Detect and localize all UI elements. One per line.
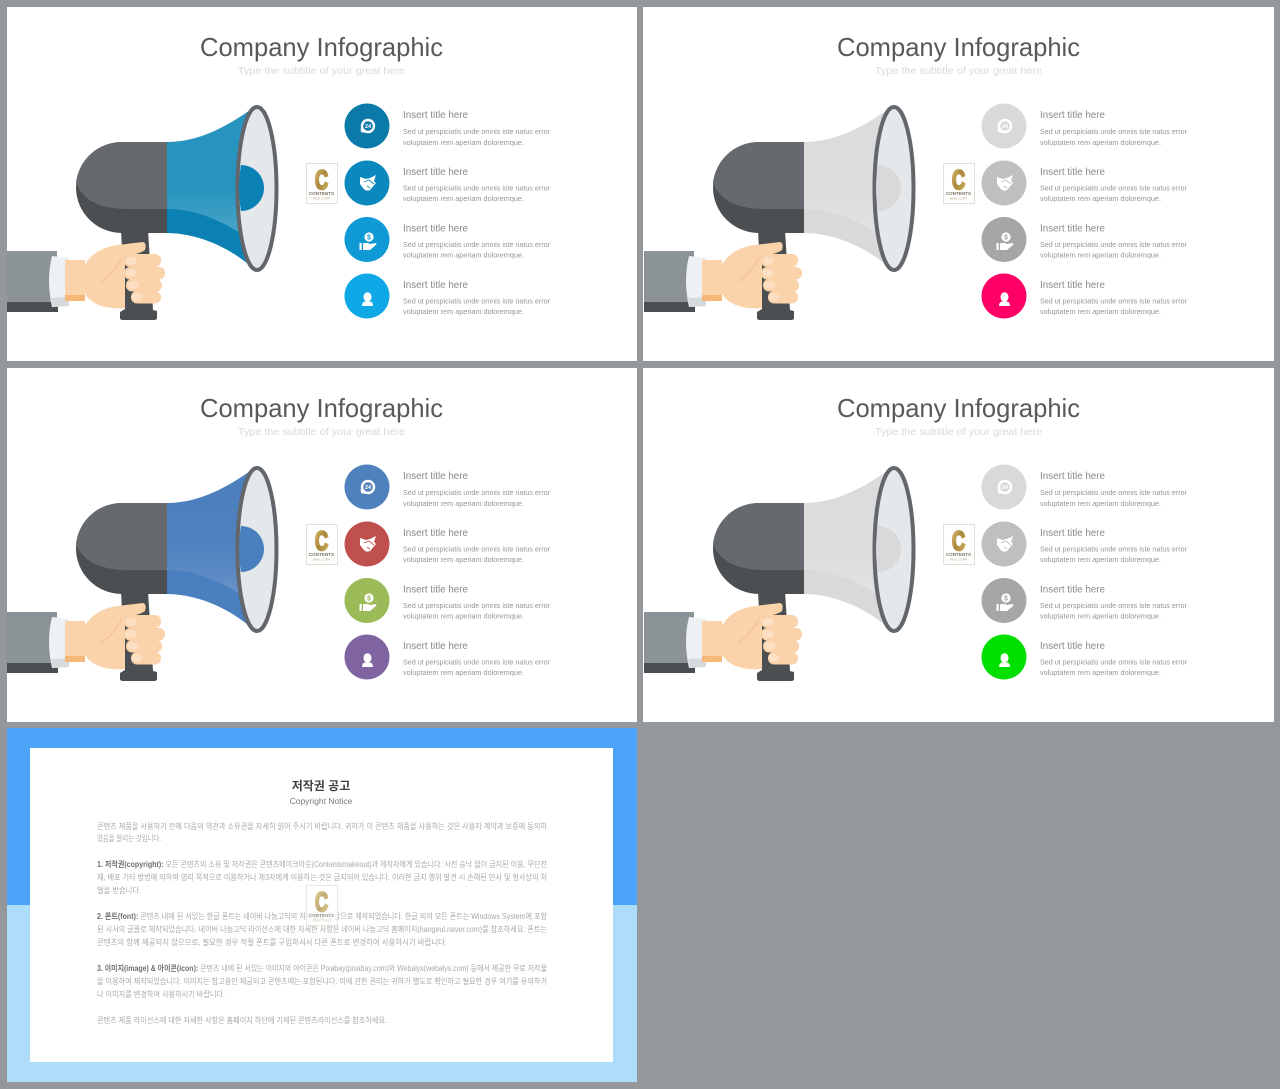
item 1: Insert title here bbox=[1040, 471, 1105, 482]
item 1 bbox=[344, 464, 550, 510]
panel: grey megaphone with green accent bbox=[643, 368, 1274, 722]
item 3: voluptatem rem aperiam doloremque. bbox=[1040, 612, 1161, 620]
item 4: Sed ut perspiciatis unde omnis iste natus error bbox=[403, 296, 550, 306]
item 2: Sed ut perspiciatis unde omnis iste natus error bbox=[403, 544, 550, 554]
text block: copyright: 재, 배포 기타 방법에 의하여 영리 목적으로 이용하거나 제3자에게 이용하는 것은 금지되어 있습니다. 이러한 금지 행위 발견 시 손해된 민사 및 형사상의 처 bbox=[97, 872, 547, 882]
icon: megaphone held in hand bbox=[644, 466, 914, 681]
item 4: Sed ut perspiciatis unde omnis iste natus error bbox=[1040, 296, 1187, 306]
title: Company Infographic bbox=[837, 32, 1080, 62]
item 4: voluptatem rem aperiam doloremque. bbox=[403, 668, 524, 677]
item 1: Sed ut perspiciatis unde omnis iste natus error bbox=[1040, 488, 1187, 497]
item 3 bbox=[344, 578, 550, 623]
item 3: voluptatem rem aperiam doloremque. bbox=[403, 612, 524, 620]
item 1: voluptatem rem aperiam doloremque. bbox=[403, 499, 524, 508]
text block: font: 2. 폰트(font): 콘텐츠 내에 된 서있는 한글 폰트는 네이버 나눔고딕의 저작물을 무상으로 제작되었습니다. 한글 외의 모든 폰트는 Windows System에 포함 bbox=[97, 911, 547, 921]
item 1: Insert title here bbox=[403, 471, 468, 482]
icon: contents logo bbox=[944, 164, 974, 204]
item 1: Sed ut perspiciatis unde omnis iste natus error bbox=[403, 488, 550, 497]
text block: intro bbox=[97, 821, 547, 843]
item 3: Sed ut perspiciatis unde omnis iste natus error bbox=[1040, 240, 1187, 249]
subtitle: Type the subtitle of your great here bbox=[238, 426, 405, 438]
item 3: voluptatem rem aperiam doloremque. bbox=[1040, 250, 1161, 260]
item 2 bbox=[344, 160, 550, 206]
item 1: Sed ut perspiciatis unde omnis iste natus error bbox=[403, 127, 550, 136]
item 3: Insert title here bbox=[403, 224, 468, 234]
title: Company Infographic bbox=[200, 393, 443, 423]
item 3 bbox=[982, 578, 1187, 623]
title: Company Infographic bbox=[837, 393, 1080, 423]
item 3: Sed ut perspiciatis unde omnis iste natus error bbox=[403, 601, 550, 610]
item 4: Insert title here bbox=[1040, 280, 1105, 291]
text block: font: 콘텐츠의 함께 제공되지 않으므로, 필요한 경우 적절 폰트를 구입하셔서 다른 폰트로 변경하여 사용하시기 바랍니다. bbox=[97, 937, 447, 947]
item 2 bbox=[982, 160, 1187, 206]
item 4: Sed ut perspiciatis unde omnis iste natus error bbox=[1040, 658, 1187, 666]
item 4 bbox=[982, 634, 1187, 680]
text block: intro: 였음을 알리는 것입니다. bbox=[97, 833, 161, 843]
text block: images bbox=[97, 963, 547, 999]
item 4: Sed ut perspiciatis unde omnis iste natus error bbox=[403, 658, 550, 666]
icon: contents logo bbox=[306, 886, 338, 926]
item 4: Insert title here bbox=[403, 641, 468, 652]
subtitle: Type the subtitle of your great here bbox=[238, 65, 405, 77]
item 1: voluptatem rem aperiam doloremque. bbox=[403, 138, 524, 147]
icon: megaphone held in hand bbox=[644, 105, 914, 320]
text block: license note: 콘텐츠 제품 라이선스에 대한 자세한 사항은 홈페이지 하단에 기재된 콘텐츠라이선스를 참조하세요. bbox=[97, 1015, 387, 1025]
item 1: Sed ut perspiciatis unde omnis iste natus error bbox=[1040, 127, 1187, 136]
panel: blue megaphone bbox=[7, 7, 637, 361]
item 2 bbox=[344, 522, 550, 566]
item 1 bbox=[982, 104, 1187, 148]
item 3: Insert title here bbox=[403, 584, 468, 596]
icon: megaphone held in hand bbox=[7, 105, 276, 320]
item 4: voluptatem rem aperiam doloremque. bbox=[1040, 307, 1161, 316]
item 2: Sed ut perspiciatis unde omnis iste natus error bbox=[403, 184, 550, 192]
item 4: voluptatem rem aperiam doloremque. bbox=[403, 307, 524, 316]
item 3: Insert title here bbox=[1040, 584, 1105, 596]
item 2: Insert title here bbox=[1040, 528, 1105, 539]
item 2: Sed ut perspiciatis unde omnis iste natus error bbox=[1040, 184, 1187, 192]
item 3: voluptatem rem aperiam doloremque. bbox=[403, 250, 524, 260]
item 3 bbox=[982, 217, 1187, 262]
subtitle: Type the subtitle of your great here bbox=[875, 65, 1042, 77]
item 4: voluptatem rem aperiam doloremque. bbox=[1040, 668, 1161, 677]
item 4 bbox=[344, 634, 550, 680]
item 3: Sed ut perspiciatis unde omnis iste natus error bbox=[1040, 601, 1187, 610]
item 4: Insert title here bbox=[1040, 641, 1105, 652]
item 4 bbox=[982, 274, 1187, 318]
icon: contents logo bbox=[306, 164, 338, 204]
item 2: voluptatem rem aperiam doloremque. bbox=[1040, 555, 1161, 564]
text block: images: 나 이미지를 변경하여 사용하시기 바랍니다. bbox=[97, 989, 225, 999]
panel: copyright notice bbox=[7, 728, 637, 1082]
icon: megaphone held in hand bbox=[7, 466, 276, 681]
text block: copyright: 1. 저작권(copyright): 모든 콘텐츠의 소유 및 저작권은 콘텐츠메이크아웃(Contentsmakeout)과 제작자에게 있습니다. 사전 승낙 없이 금지된 이용, 무단전 bbox=[97, 859, 547, 869]
item 2: voluptatem rem aperiam doloremque. bbox=[1040, 194, 1161, 203]
text block: copyright bbox=[97, 859, 547, 895]
text block: images: 을 이용하여 제작되었습니다. 이미지는 참고용만 제공되고 콘텐츠에는 포함된니다. 이에 관한 권리는 귀하가 별도로 확인하고 필요한 경우 여기를 유의하거 bbox=[97, 976, 547, 986]
icon: contents logo bbox=[944, 524, 974, 564]
panel: indigo megaphone with multicolour icons bbox=[7, 368, 637, 722]
item 2: voluptatem rem aperiam doloremque. bbox=[403, 555, 524, 564]
subtitle: Type the subtitle of your great here bbox=[875, 426, 1042, 438]
item 3 bbox=[344, 217, 550, 262]
item 1 bbox=[344, 104, 550, 148]
item 2: Insert title here bbox=[1040, 167, 1105, 178]
text block: font bbox=[97, 911, 547, 947]
item 2: voluptatem rem aperiam doloremque. bbox=[403, 194, 524, 203]
item 4 bbox=[344, 274, 550, 318]
item 1: Insert title here bbox=[1040, 110, 1105, 121]
item 1: voluptatem rem aperiam doloremque. bbox=[1040, 138, 1161, 147]
subheading: Copyright Notice bbox=[290, 796, 353, 806]
item 2: Sed ut perspiciatis unde omnis iste natus error bbox=[1040, 544, 1187, 554]
title: Company Infographic bbox=[200, 32, 443, 62]
item 2: Insert title here bbox=[403, 528, 468, 539]
item 1: Insert title here bbox=[403, 110, 468, 121]
item 4: Insert title here bbox=[403, 280, 468, 291]
heading: 저작권 공고 bbox=[292, 778, 350, 793]
text block: images: 3. 이미지(image) & 아이콘(icon): 콘텐츠 내에 된 서있는 이미지와 아이콘은 Pixabay(pixabay.com)와 Webalys(webalys.com) 등에서 제공한 무료 저작물 bbox=[97, 963, 547, 973]
item 2 bbox=[982, 522, 1187, 566]
item 1: voluptatem rem aperiam doloremque. bbox=[1040, 499, 1161, 508]
icon: contents logo bbox=[306, 524, 338, 564]
text block: intro: 콘텐츠 제품을 사용하기 전에 다음의 약관과 소유권을 자세히 읽어 주시기 바랍니다. 귀하가 이 콘텐츠 제품을 사용하는 것은 사용자 계약과 보증에 동의하 bbox=[97, 821, 547, 831]
text block: font: 된 시서의 글꼴로 제작되었습니다. 네이버 나눔고딕 라이선스에 대한 자세한 사항은 네이버 나눔고딕 홈페이지(hangeul.naver.com)를 참조하세요. 폰트는 bbox=[97, 924, 547, 934]
item 2: Insert title here bbox=[403, 167, 468, 178]
item 3: Insert title here bbox=[1040, 224, 1105, 234]
item 1 bbox=[982, 464, 1187, 510]
text block: copyright: 벌을 받습니다. bbox=[97, 885, 141, 895]
panel: grey megaphone with pink accent bbox=[643, 7, 1274, 361]
item 3: Sed ut perspiciatis unde omnis iste natus error bbox=[403, 240, 550, 249]
